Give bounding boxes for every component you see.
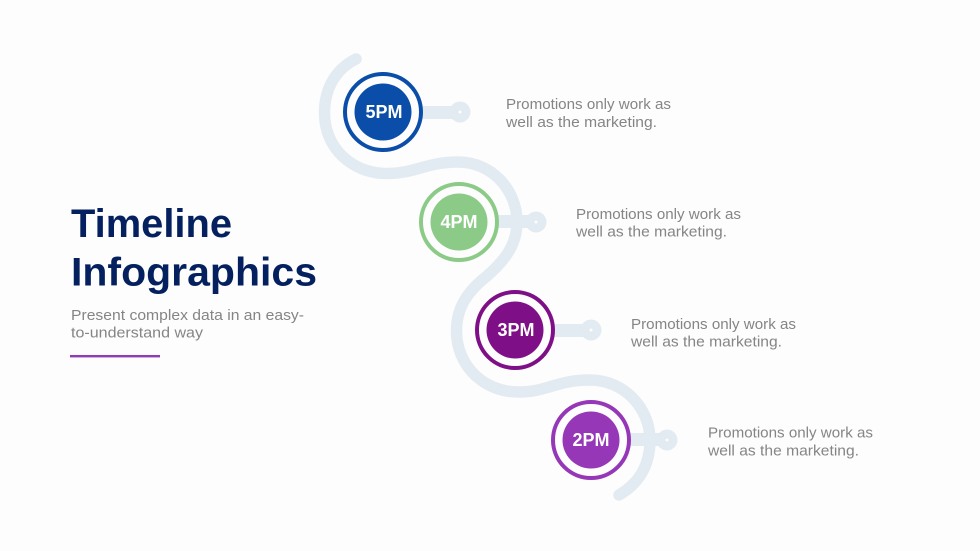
node: 3PM: 3PM xyxy=(498,320,534,340)
node: 2PM: 2PM xyxy=(572,430,610,450)
title: Infographics xyxy=(71,250,317,294)
accent underline xyxy=(70,355,160,357)
connector: 4PM xyxy=(496,212,546,232)
subtitle xyxy=(71,308,304,342)
node: 4PM xyxy=(421,184,497,260)
text: 4PM description: well as the marketing. xyxy=(575,224,727,240)
connectors xyxy=(420,102,678,450)
node: 5PM xyxy=(345,74,421,150)
text: 5PM description xyxy=(505,97,671,131)
subtitle: to-understand way xyxy=(71,326,204,342)
title: Timeline xyxy=(71,202,232,246)
text: 5PM description: Promotions only work as xyxy=(506,97,671,113)
node: 5PM: 5PM xyxy=(366,102,402,122)
subtitle: Present complex data in an easy- xyxy=(71,308,304,324)
connector: 2PM xyxy=(628,430,678,450)
text: 2PM description xyxy=(707,426,873,460)
text: 3PM description: well as the marketing. xyxy=(630,334,782,350)
text: 3PM description xyxy=(630,317,796,350)
connector: 3PM xyxy=(552,320,602,340)
text: 2PM description: well as the marketing. xyxy=(707,444,859,460)
winding timeline path xyxy=(324,59,650,495)
node: 3PM xyxy=(477,292,553,368)
node: 2PM xyxy=(553,402,629,478)
title xyxy=(71,202,317,294)
text: 4PM description xyxy=(575,207,741,240)
text: 2PM description: Promotions only work as xyxy=(708,426,873,442)
text: 4PM description: Promotions only work as xyxy=(576,207,741,223)
text: 5PM description: well as the marketing. xyxy=(505,115,657,131)
connector: 5PM xyxy=(420,102,470,122)
node: 4PM: 4PM xyxy=(440,212,478,232)
text: 3PM description: Promotions only work as xyxy=(631,317,796,333)
